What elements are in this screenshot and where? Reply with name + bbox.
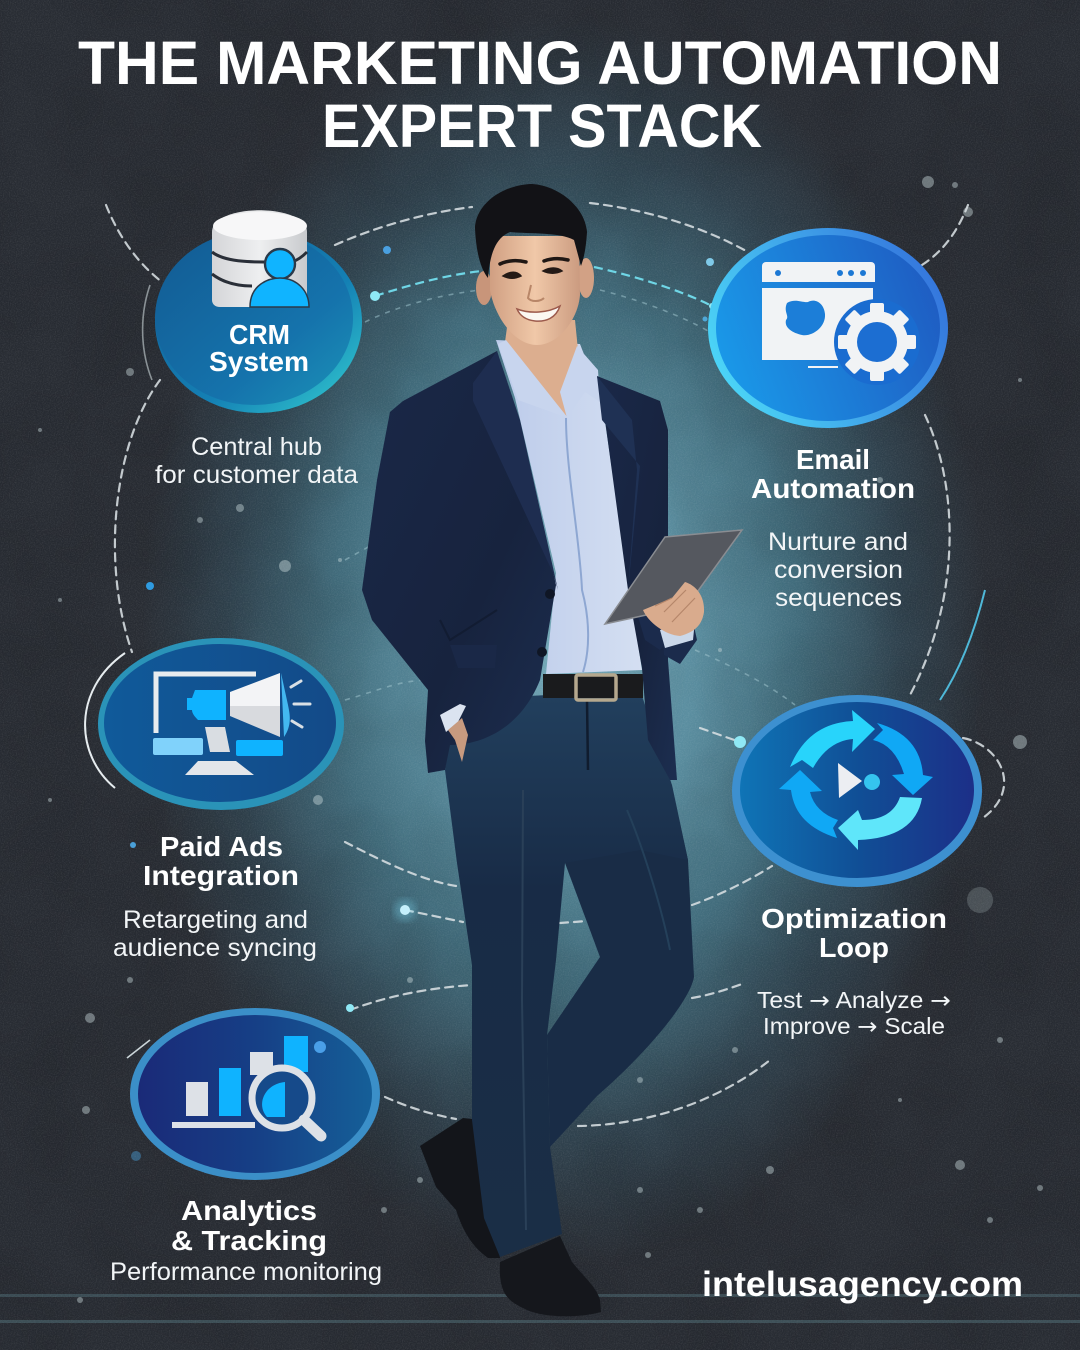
heading: CRM System: CRM [229, 319, 290, 350]
heading: Optimization Loop: Loop [819, 932, 889, 963]
badge inner: email [716, 235, 940, 421]
collar [498, 340, 600, 418]
network dashed connector lines [85, 203, 1004, 1126]
description: optimization: Test → Analyze → [757, 987, 951, 1014]
heading: CRM System: System [209, 346, 309, 377]
heading: CRM System [209, 319, 309, 377]
description: email: conversion [774, 556, 903, 584]
description: ads: audience syncing [113, 934, 317, 962]
left hand in pocket [440, 704, 468, 762]
trousers [445, 690, 694, 1257]
belt [543, 674, 643, 700]
icon: loop arrows with play [779, 710, 933, 850]
badge inner: analytics [138, 1015, 372, 1173]
icon: bar chart with magnifier [172, 1036, 326, 1136]
badge inner: optimization [740, 702, 974, 878]
heading: Email Automation: Email [796, 444, 870, 475]
nose [528, 285, 544, 301]
title: EXPERT STACK [322, 92, 762, 160]
heading: Email Automation: Automation [751, 473, 915, 504]
hair [475, 184, 587, 278]
icon: database with user [212, 210, 309, 307]
shirt placket [566, 418, 588, 672]
panel: email automation [708, 228, 948, 612]
description: CRM: for customer data [155, 461, 358, 489]
description: email: Nurture and [768, 528, 908, 556]
badge: ads [98, 638, 344, 810]
icon: browser window with gear [762, 262, 920, 385]
title [78, 29, 1002, 160]
heading: Optimization Loop: Optimization [761, 903, 947, 934]
description: email: sequences [775, 584, 902, 612]
description: ads: Retargeting and [123, 906, 308, 934]
heading: Analytics & Tracking: & Tracking [171, 1225, 327, 1256]
panel: paid ads integration [98, 638, 344, 962]
heading: Analytics & Tracking: Analytics [181, 1195, 317, 1226]
panel: optimization loop [732, 695, 982, 1040]
heading: Paid Ads Integration [143, 831, 299, 891]
badge: optimization [732, 695, 982, 887]
eyes [503, 268, 562, 278]
jacket [362, 351, 697, 780]
front shoe [500, 1236, 601, 1316]
description: ads [113, 906, 317, 962]
panel: CRM system [155, 210, 362, 489]
badge inner: ads [104, 644, 336, 802]
icon: monitor with megaphone [153, 673, 310, 775]
title: THE MARKETING AUTOMATION [78, 29, 1002, 97]
badge inner: CRM [155, 231, 353, 405]
head [475, 184, 594, 345]
heading: Optimization Loop [761, 903, 947, 963]
right hand and cuff [643, 582, 704, 648]
neck [505, 320, 578, 418]
description: CRM [155, 433, 358, 489]
heading: Paid Ads Integration: Paid Ads [160, 831, 283, 862]
back shoe [420, 1118, 500, 1258]
heading: Analytics & Tracking [171, 1195, 327, 1256]
shirt [496, 340, 642, 674]
badge: email [708, 228, 948, 428]
tablet [605, 530, 742, 624]
badge: CRM [155, 231, 362, 413]
description: CRM: Central hub [191, 433, 322, 461]
smile [517, 306, 560, 321]
panel: analytics and tracking [110, 1008, 382, 1286]
heading: Email Automation [751, 444, 915, 504]
figure: man in navy suit holding tablet [362, 184, 742, 1316]
eyebrows [500, 259, 568, 264]
badge: analytics [130, 1008, 380, 1180]
heading: Paid Ads Integration: Integration [143, 860, 299, 891]
description: optimization [757, 987, 951, 1040]
description: email [768, 528, 908, 612]
description: analytics: Performance monitoring [110, 1258, 382, 1286]
description: optimization: Improve → Scale [763, 1013, 945, 1040]
website url: intelusagency.com [702, 1265, 1023, 1304]
